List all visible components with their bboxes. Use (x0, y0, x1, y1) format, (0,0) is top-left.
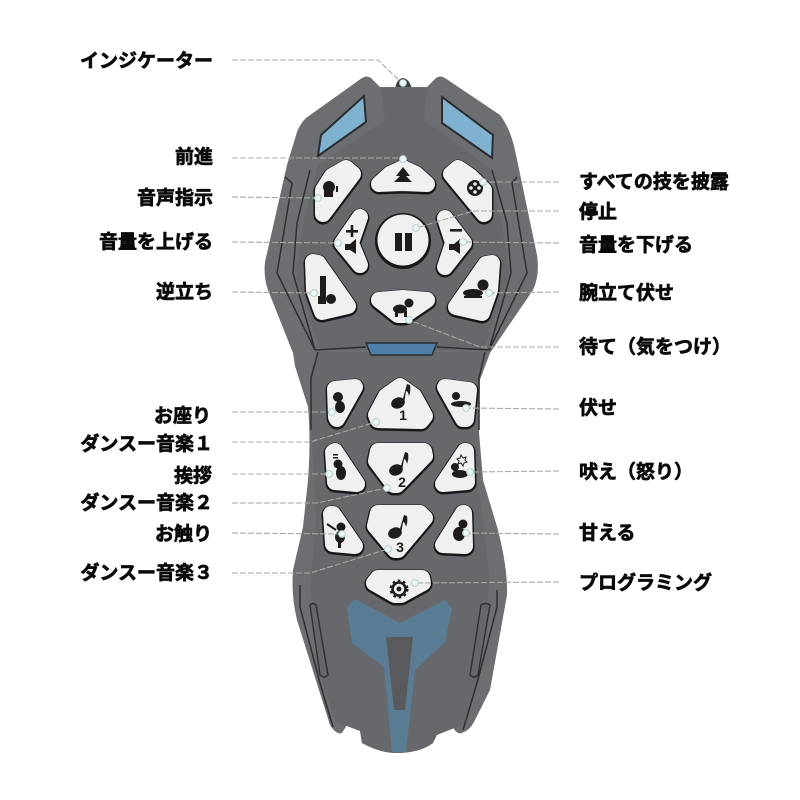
label: dance music 3: ダンスー音楽３ (80, 561, 213, 584)
outer shell (265, 76, 538, 753)
leader: greeting (232, 471, 332, 477)
leader: volume up (232, 240, 341, 246)
buttons (313, 167, 492, 598)
right pill groove (470, 604, 490, 677)
contour lines (277, 170, 527, 730)
label: stay alert: 待て（気をつけ） (579, 336, 731, 358)
button: pause (375, 213, 431, 269)
button: lie down (445, 387, 471, 420)
leader: cuddle (463, 530, 559, 536)
leader: voice (232, 195, 321, 201)
button: touch (327, 514, 355, 548)
leader lines and dots (232, 60, 559, 586)
button: stay alert (379, 298, 427, 317)
label: lie down: 伏せ (579, 396, 617, 419)
leader: all skills (480, 179, 559, 185)
leader: push-ups (486, 290, 559, 296)
leader: programming (412, 580, 559, 586)
label: programming: プログラミング (579, 571, 712, 594)
label: dance music 1: ダンスー音楽１ (80, 432, 213, 455)
label: stop: 停止 (579, 201, 617, 223)
button: greeting (333, 451, 357, 485)
left labels (80, 50, 213, 584)
leader: touch (232, 531, 345, 537)
button: bark angry (443, 451, 468, 485)
leader: forward (232, 156, 406, 162)
label: show all skills: すべての技を披露 (579, 171, 729, 193)
indicator light (395, 78, 412, 90)
button: sit (333, 387, 355, 420)
label: forward: 前進 (175, 146, 213, 168)
blue V emblem (347, 599, 452, 752)
label: volume down: 音量を下げる (579, 234, 693, 256)
leader: music 3 (232, 546, 391, 573)
label: dance music 2: ダンスー音楽２ (80, 491, 213, 514)
button: dance music 1: 1 (399, 407, 407, 423)
button: forward (379, 167, 427, 185)
label: indicator: インジケーター (80, 50, 213, 72)
button: show all skills (451, 168, 484, 215)
label: push-ups: 腕立て伏せ (579, 281, 674, 304)
button: handstand (313, 262, 348, 313)
label: bark angry: 吠え（怒り） (579, 461, 693, 483)
label: voice command: 音声指示 (137, 187, 213, 209)
leader: pause (413, 211, 559, 231)
button: push-ups (456, 263, 492, 314)
button: volume down (445, 218, 464, 268)
label: volume up: 音量を上げる (99, 231, 213, 253)
button: volume up (342, 217, 360, 266)
remote control body (265, 76, 538, 753)
button: dance music 2 (376, 451, 425, 490)
right labels (579, 171, 731, 594)
leader: handstand (232, 290, 317, 296)
button: dance music 2: 2 (398, 474, 406, 490)
left pill groove (310, 604, 328, 677)
label: touch: お触り (155, 523, 212, 545)
leader: lie down (463, 405, 559, 411)
button: cuddle (443, 513, 468, 547)
right blue panel (442, 97, 493, 158)
leader: music 1 (232, 419, 379, 442)
label: greeting: 挨拶 (174, 465, 212, 487)
button: dance music 3 (375, 513, 425, 555)
label: handstand: 逆立ち (156, 281, 213, 303)
centre plate lower (310, 352, 490, 753)
label: cuddle: 甘える (579, 522, 635, 544)
label: sit: お座り (154, 405, 211, 427)
leader: bark (467, 469, 559, 475)
button: programming (374, 578, 423, 598)
leader: indicator (232, 60, 406, 86)
leader: volume down (460, 239, 559, 245)
centre plate upper (296, 88, 509, 350)
left blue panel (318, 96, 366, 156)
blue middle slot (366, 343, 437, 355)
leader: stay (406, 317, 559, 347)
leader: sit (232, 409, 335, 415)
button: dance music 3: 3 (396, 539, 404, 555)
emblem slot (386, 637, 413, 710)
button: voice command (323, 168, 353, 215)
leader: music 2 (232, 485, 390, 503)
button: dance music 1 (376, 384, 425, 423)
